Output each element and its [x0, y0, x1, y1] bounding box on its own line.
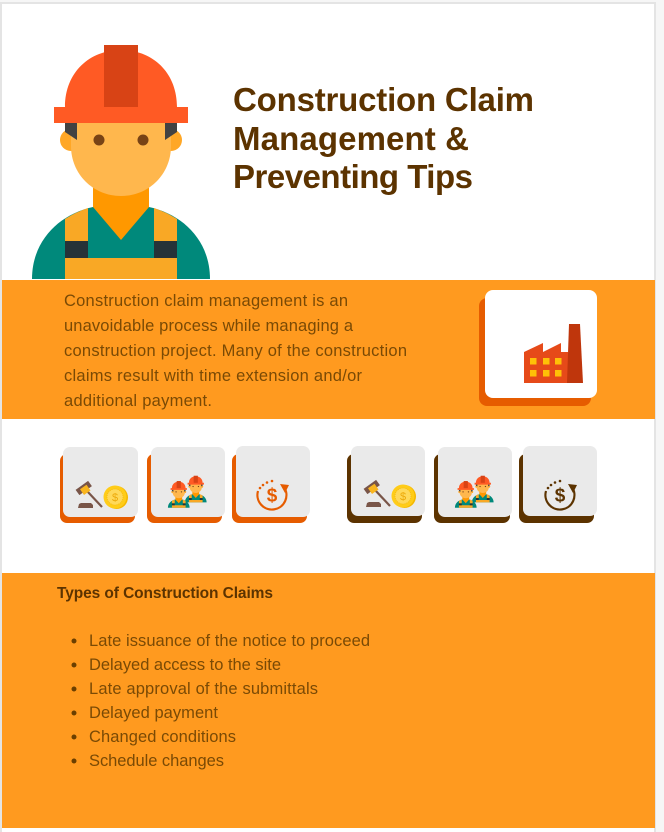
title: Preventing Tips [233, 158, 473, 195]
introduction text [64, 292, 407, 410]
title: Management & [233, 120, 469, 157]
card: dollar cycle (brown) [519, 446, 597, 523]
claims list: Delayed payment [89, 704, 218, 722]
introduction text: unavoidable process while managing a [64, 317, 354, 335]
heading: Types of Construction Claims [57, 585, 273, 602]
claims list: Late issuance of the notice to proceed [89, 632, 370, 650]
card: workers (orange) [147, 447, 225, 523]
card: gavel and coin (brown) [347, 446, 425, 523]
introduction text: claims result with time extension and/or [64, 367, 362, 385]
introduction text: construction project. Many of the construction [64, 342, 407, 360]
claims list: Schedule changes [89, 752, 224, 770]
introduction text: additional payment. [64, 392, 212, 410]
card: dollar cycle (brown): $ [555, 486, 566, 506]
card: dollar cycle (orange): $ [267, 486, 278, 506]
claims list: Delayed access to the site [89, 656, 281, 674]
icon: construction worker [32, 45, 210, 279]
title: Construction Claim [233, 81, 534, 118]
card: workers (brown) [434, 447, 512, 523]
introduction text: Construction claim management is an [64, 292, 348, 310]
claims list: Late approval of the submittals [89, 680, 318, 698]
claims list: Changed conditions [89, 728, 236, 746]
title [233, 81, 534, 195]
card: gavel and coin (orange) [60, 447, 138, 523]
panel: introduction [2, 280, 655, 419]
panel: types of construction claims [2, 573, 655, 828]
claims list [72, 632, 370, 770]
card: dollar cycle (orange) [232, 446, 310, 523]
icon card: factory [479, 290, 597, 406]
